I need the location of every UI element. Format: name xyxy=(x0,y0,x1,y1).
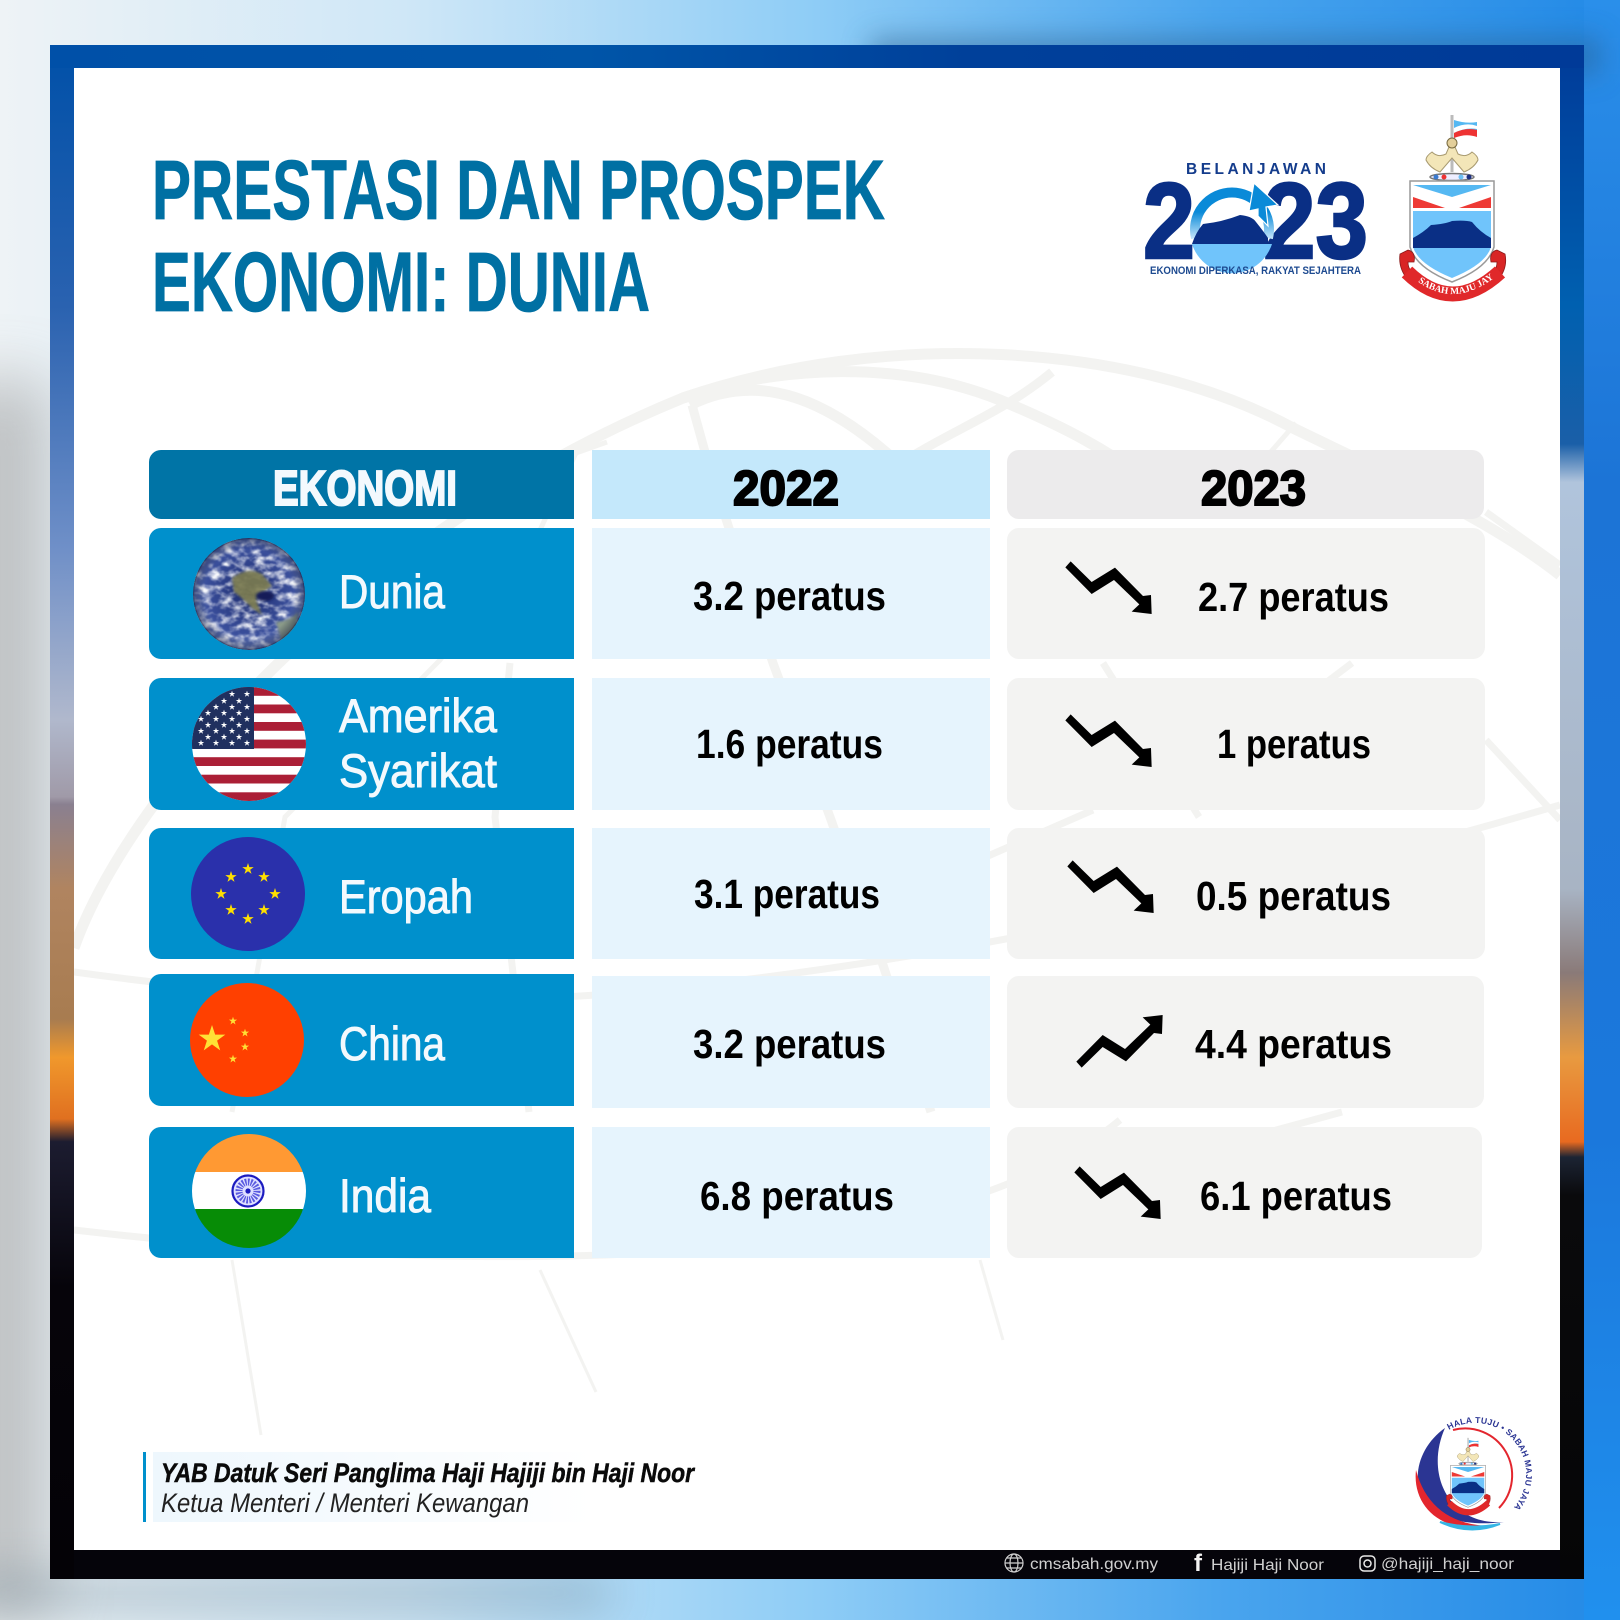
row: China: 3.2 peratus xyxy=(693,1021,886,1067)
logo: Belanjawan 2023: 23 xyxy=(1263,160,1368,281)
row: Eropah xyxy=(149,828,1485,959)
icon: down trend arrow xyxy=(1067,860,1154,913)
row: Dunia: 2.7 peratus xyxy=(1198,574,1389,620)
icon: down trend arrow xyxy=(1065,561,1152,614)
row: India xyxy=(149,1127,1482,1258)
row: India: India xyxy=(339,1169,432,1222)
icon: instagram xyxy=(1360,1556,1375,1571)
speaker attribution xyxy=(143,1452,695,1522)
icon: down trend arrow xyxy=(1065,714,1152,767)
row: Amerika Syarikat xyxy=(149,678,1485,810)
icon: up trend arrow xyxy=(1076,1015,1163,1068)
footer social links: Hajiji Haji Noor xyxy=(1211,1557,1325,1574)
title: PRESTASI DAN PROSPEK xyxy=(152,143,885,237)
title xyxy=(152,143,885,329)
table header xyxy=(149,450,1484,519)
footer social links: cmsabah.gov.my xyxy=(1030,1556,1158,1573)
logo: Belanjawan 2023 xyxy=(1143,160,1368,281)
faint globe watermark xyxy=(74,354,1560,1435)
row: Dunia: Dunia xyxy=(339,565,446,618)
row: Amerika Syarikat: Syarikat xyxy=(339,744,497,797)
row: China: China xyxy=(339,1017,446,1070)
speaker attribution: Ketua Menteri / Menteri Kewangan xyxy=(161,1488,529,1518)
row: China: 4.4 peratus xyxy=(1195,1021,1392,1067)
icon: EU flag xyxy=(191,837,305,951)
icon: earth xyxy=(193,538,305,650)
row: Eropah: 0.5 peratus xyxy=(1196,873,1391,919)
table header: EKONOMI xyxy=(273,462,457,516)
logo: Hala Tuju Sabah Maju Jaya: HALA TUJU • SABAH MAJU JAYA xyxy=(1446,1417,1532,1510)
row: Amerika Syarikat: Amerika xyxy=(339,689,498,742)
row: Dunia xyxy=(149,528,1485,659)
logo: Belanjawan 2023: EKONOMI DIPERKASA, RAKYAT SEJAHTERA xyxy=(1150,265,1361,277)
logo: Belanjawan 2023: 2 xyxy=(1143,160,1195,281)
row: India: 6.1 peratus xyxy=(1200,1173,1392,1219)
row: Eropah: 3.1 peratus xyxy=(694,871,880,917)
logo: Sabah coat of arms: SABAH MAJU JAYA xyxy=(1418,273,1492,294)
row: India: 6.8 peratus xyxy=(700,1173,894,1219)
icon: down trend arrow xyxy=(1074,1166,1161,1219)
table header: 2023 xyxy=(1201,462,1306,516)
footer social links: @hajiji_haji_noor xyxy=(1381,1556,1515,1573)
icon: globe xyxy=(1005,1554,1023,1572)
row: China xyxy=(149,974,1484,1108)
table header: 2022 xyxy=(733,462,839,516)
footer social links: f xyxy=(1194,1550,1203,1577)
icon: China flag xyxy=(190,983,304,1097)
row: Amerika Syarikat: 1 peratus xyxy=(1217,721,1371,767)
speaker attribution: YAB Datuk Seri Panglima Haji Hajiji bin Haji Noor xyxy=(161,1458,695,1488)
row: Dunia: 3.2 peratus xyxy=(693,573,886,619)
logo: Sabah coat of arms xyxy=(1399,115,1506,302)
title: EKONOMI: DUNIA xyxy=(152,235,650,329)
footer social links xyxy=(1005,1550,1515,1577)
icon: India flag xyxy=(190,1134,308,1249)
logo: Belanjawan 2023: BELANJAWAN xyxy=(1186,161,1326,178)
logo: Hala Tuju Sabah Maju Jaya xyxy=(1416,1417,1532,1530)
row: Eropah: Eropah xyxy=(339,870,473,923)
row: Amerika Syarikat: 1.6 peratus xyxy=(696,721,883,767)
icon: USA flag xyxy=(190,687,308,801)
